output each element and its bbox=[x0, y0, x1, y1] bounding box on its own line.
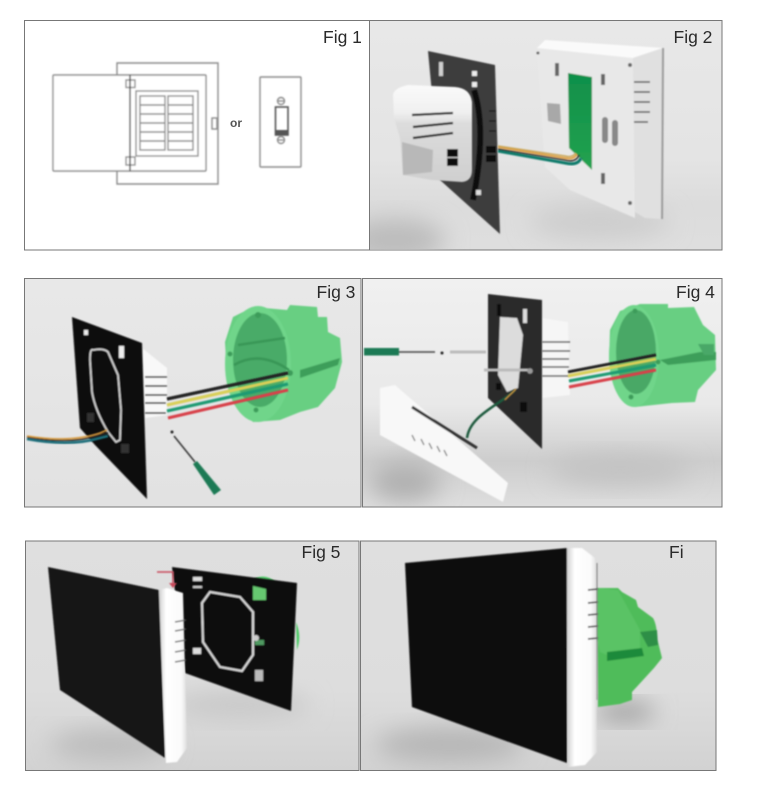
left wire bundle bbox=[27, 430, 108, 443]
black mounting plate bbox=[72, 317, 147, 499]
heading: Fi (cropped Fig 6): Fi bbox=[669, 542, 684, 562]
white face plate laid back bbox=[380, 385, 508, 502]
thermostat front bbox=[405, 548, 598, 767]
panel: Fig 6 finished installation bbox=[360, 541, 716, 770]
thermostat front, black face bbox=[48, 567, 187, 763]
back plate bbox=[428, 51, 500, 234]
wire bundle bbox=[498, 146, 581, 164]
heading: Fig 1: Fig 1 bbox=[323, 27, 362, 47]
black plate bbox=[172, 567, 297, 711]
wire to face plate bbox=[467, 389, 516, 438]
screwdriver bbox=[364, 348, 444, 356]
white thermostat front shell bbox=[536, 40, 663, 219]
green box bbox=[597, 588, 662, 707]
junction box, green bbox=[609, 304, 716, 407]
icon: breaker panel bbox=[53, 63, 218, 184]
junction box, green bbox=[225, 305, 342, 422]
heading: Fig 2: Fig 2 bbox=[674, 27, 712, 47]
panel: Fig 1 breaker box or switch bbox=[24, 20, 370, 250]
heading: Fig 4: Fig 4 bbox=[676, 282, 715, 302]
panel: Fig 2 opening the thermostat bbox=[370, 20, 722, 250]
coloured wires bbox=[167, 373, 288, 418]
green box behind plate bbox=[252, 576, 299, 650]
panel: Fig 4 mounting the plate bbox=[362, 278, 722, 507]
panel: Fig 3 wires and junction box bbox=[24, 278, 361, 507]
heading: Fig 5: Fig 5 bbox=[302, 542, 340, 562]
white module behind plate bbox=[142, 348, 167, 418]
black plate with opening bbox=[488, 294, 542, 449]
label: or: or bbox=[230, 116, 242, 130]
heading: Fig 3: Fig 3 bbox=[316, 282, 355, 302]
screw guides bbox=[450, 352, 533, 374]
thermostat rear module bbox=[393, 85, 472, 182]
screwdriver bbox=[170, 430, 221, 495]
icon: wall switch bbox=[260, 77, 301, 167]
red arrow bbox=[157, 572, 177, 588]
white module behind plate bbox=[542, 318, 570, 398]
coloured wires bbox=[568, 355, 656, 387]
panel: Fig 5 fitting the front bbox=[26, 541, 359, 770]
